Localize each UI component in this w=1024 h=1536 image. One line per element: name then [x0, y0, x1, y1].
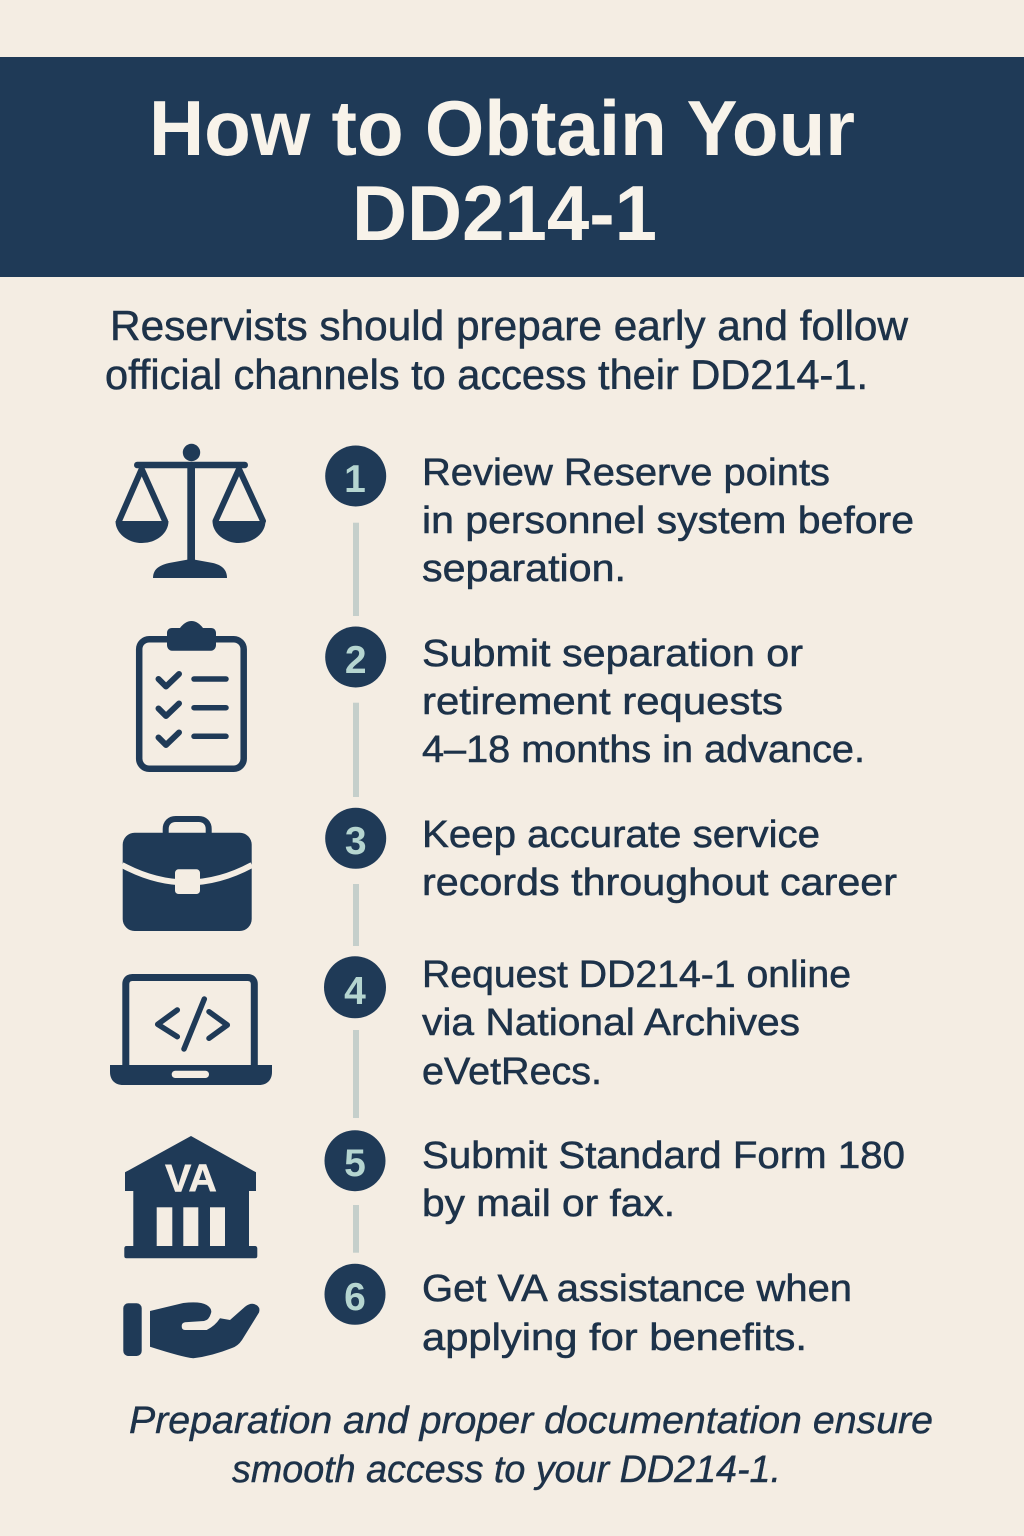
connector lines [353, 523, 359, 1253]
step 6: Get VA assistance when [422, 1268, 852, 1310]
step 4 [324, 954, 851, 1093]
icon: laptop with code [110, 978, 272, 1085]
icon: open hand [123, 1302, 259, 1358]
icon: VA building [124, 1136, 257, 1258]
step 2 [325, 626, 865, 771]
closing note: smooth access to your DD214-1. [232, 1449, 781, 1491]
step 3: Keep accurate service [422, 814, 820, 856]
step 4: Request DD214-1 online [422, 954, 851, 996]
step 3: 3 [345, 820, 367, 863]
icon: briefcase [122, 819, 252, 931]
step 1: separation. [422, 548, 626, 590]
icon: VA building: VA [165, 1158, 217, 1200]
step 5: 5 [344, 1142, 366, 1185]
icon: clipboard checklist [139, 621, 244, 769]
step 4: via National Archives [422, 1002, 800, 1044]
step 6 [324, 1264, 852, 1359]
icon: scales [116, 444, 266, 578]
step 1: Review Reserve points [422, 452, 830, 494]
step 5: by mail or fax. [422, 1183, 675, 1225]
closing note: Preparation and proper documentation ensure [129, 1400, 933, 1442]
title banner: How to Obtain Your [149, 84, 855, 172]
step 5: Submit Standard Form 180 [422, 1135, 905, 1177]
step 1 [325, 446, 914, 590]
title banner [0, 57, 1024, 277]
step 2: 4–18 months in advance. [422, 729, 865, 771]
intro text [105, 302, 909, 398]
step 2: retirement requests [422, 681, 783, 723]
closing note [129, 1400, 933, 1491]
step 1: 1 [344, 458, 366, 501]
step 3: records throughout career [422, 862, 897, 904]
intro text: Reservists should prepare early and follow [110, 302, 909, 349]
step 2: Submit separation or [422, 633, 803, 675]
step 4: 4 [344, 970, 366, 1013]
step 4: eVetRecs. [422, 1051, 602, 1093]
step 6: 6 [344, 1276, 366, 1319]
step 3 [325, 808, 897, 904]
step 5 [324, 1130, 905, 1225]
title banner: DD214-1 [352, 169, 657, 257]
step 6: applying for benefits. [422, 1317, 807, 1359]
intro text: official channels to access their DD214-1. [105, 351, 868, 398]
step 1: in personnel system before [422, 500, 914, 542]
step 2: 2 [345, 639, 367, 682]
